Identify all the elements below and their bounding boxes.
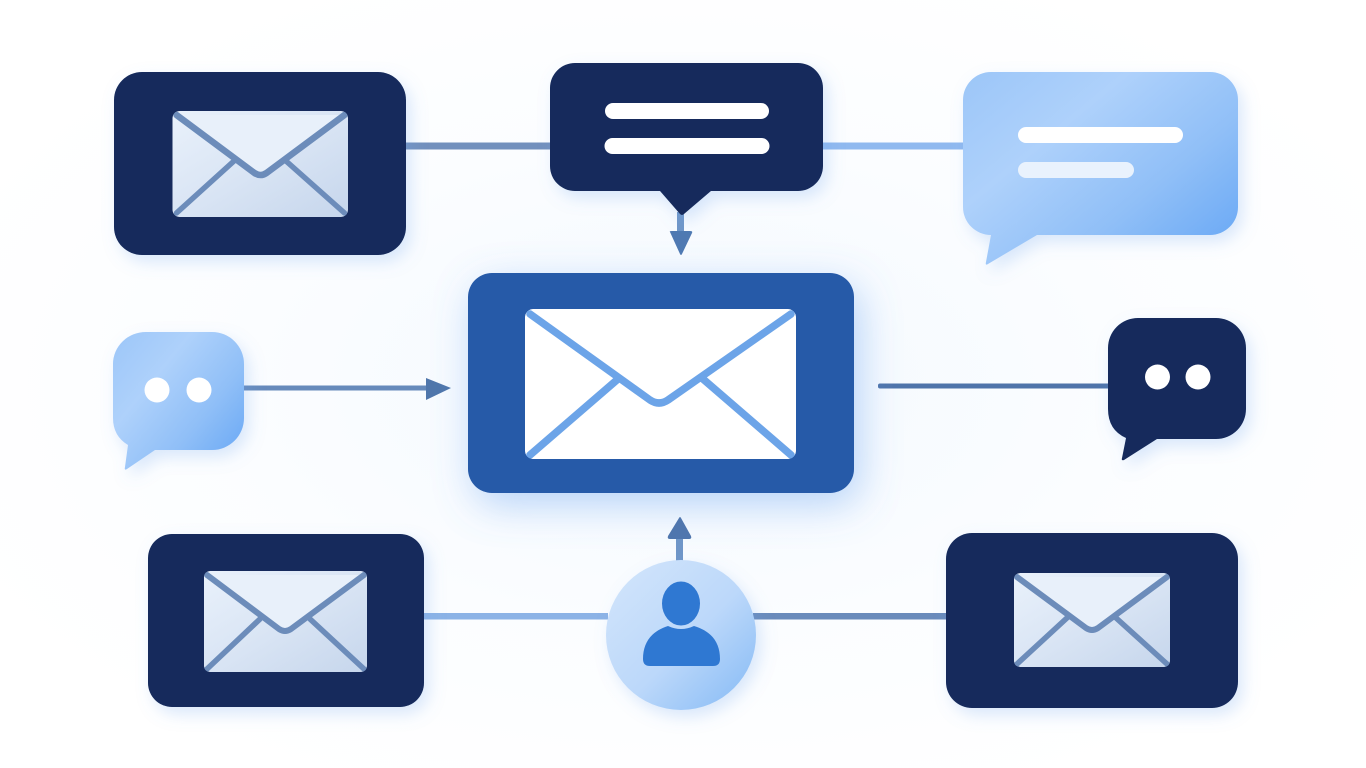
text line: short bar bbox=[1018, 162, 1134, 178]
user head bbox=[662, 582, 700, 626]
icon: user circle bbox=[606, 560, 756, 710]
arrow: user to central email bbox=[668, 517, 691, 562]
connector: central email to right bubble bbox=[878, 384, 1110, 388]
dot: right bbox=[186, 378, 212, 402]
connector: bottom-left email to user bbox=[422, 613, 608, 620]
diagram: email and message network bbox=[109, 61, 1260, 726]
icon: central envelope bbox=[525, 309, 796, 459]
panel: top message bubble with lines bbox=[550, 63, 823, 215]
panel: bottom-right email card bbox=[946, 533, 1238, 708]
connector: top message to top-right bubble bbox=[821, 142, 965, 150]
arrow: top message to central email bbox=[670, 212, 692, 255]
icon: envelope bottom-right bbox=[1014, 573, 1170, 667]
panel: central email card bbox=[468, 273, 854, 493]
text line: lower bar bbox=[604, 138, 770, 154]
dot: right bbox=[1186, 364, 1210, 390]
panel: bottom-left email card bbox=[148, 534, 424, 707]
connector: top-left email to top message bbox=[404, 142, 552, 150]
panel: left chat bubble bbox=[113, 332, 244, 470]
panel: right chat bubble bbox=[1108, 318, 1246, 460]
dot: left bbox=[144, 378, 170, 402]
panel: top-left email card bbox=[114, 72, 406, 255]
connector: user to bottom-right email bbox=[753, 613, 948, 620]
text line: upper bar bbox=[605, 103, 769, 119]
icon: envelope bottom-left bbox=[204, 571, 367, 672]
arrow: left bubble to central email bbox=[242, 378, 451, 400]
panel: top-right light blue bubble bbox=[963, 72, 1238, 265]
icon: envelope top-left bbox=[172, 111, 348, 217]
text line: long bar bbox=[1018, 127, 1183, 143]
user shoulders bbox=[643, 626, 720, 666]
dot: left bbox=[1145, 364, 1170, 390]
